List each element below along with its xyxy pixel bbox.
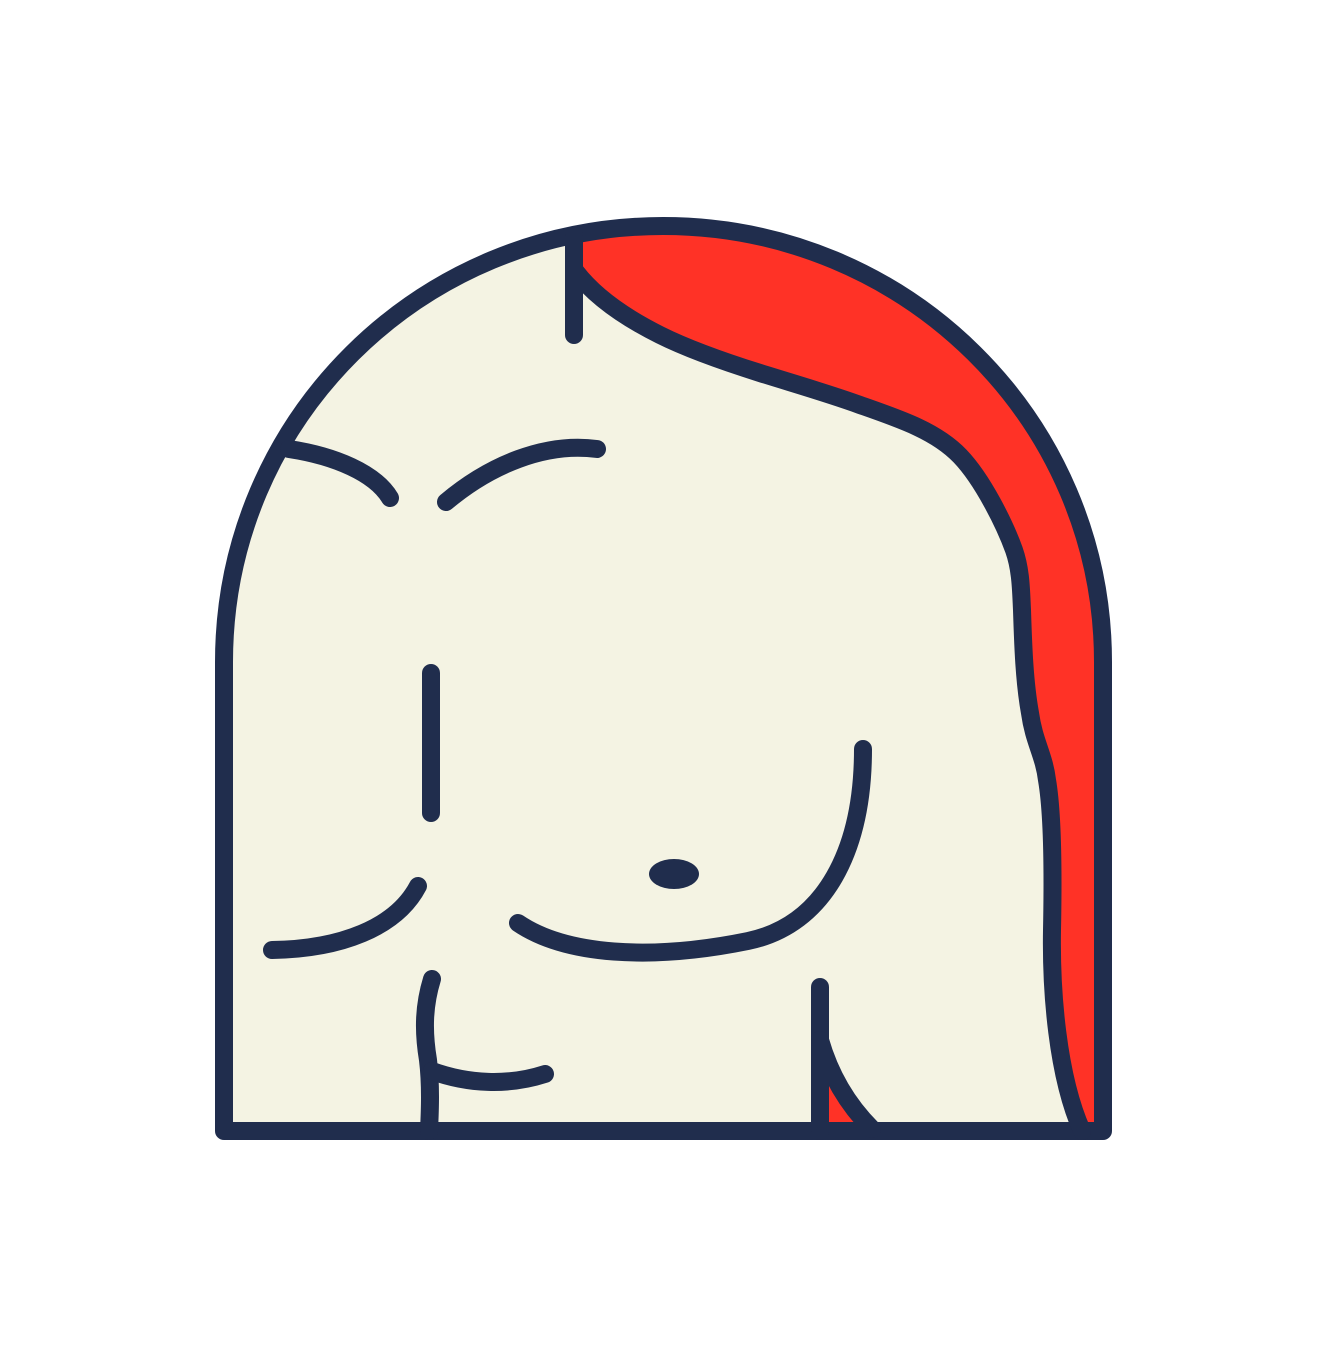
shoulder contour (576, 272, 1082, 1131)
red hair area (574, 226, 1103, 1131)
right pectoral (518, 749, 863, 953)
arch background (224, 226, 1103, 1131)
abdomen crease (432, 1071, 545, 1082)
lower right curve (820, 1040, 872, 1129)
sternum line (422, 673, 440, 813)
right collarbone (446, 448, 597, 502)
arch outline (224, 226, 1103, 1131)
abdomen centre line (425, 979, 432, 1131)
nipple (649, 859, 699, 889)
lower right vertical (811, 987, 829, 1131)
left pectoral (272, 886, 418, 950)
red triangle lower (820, 1040, 872, 1131)
left collarbone (289, 449, 390, 498)
top vertical line (565, 236, 583, 335)
